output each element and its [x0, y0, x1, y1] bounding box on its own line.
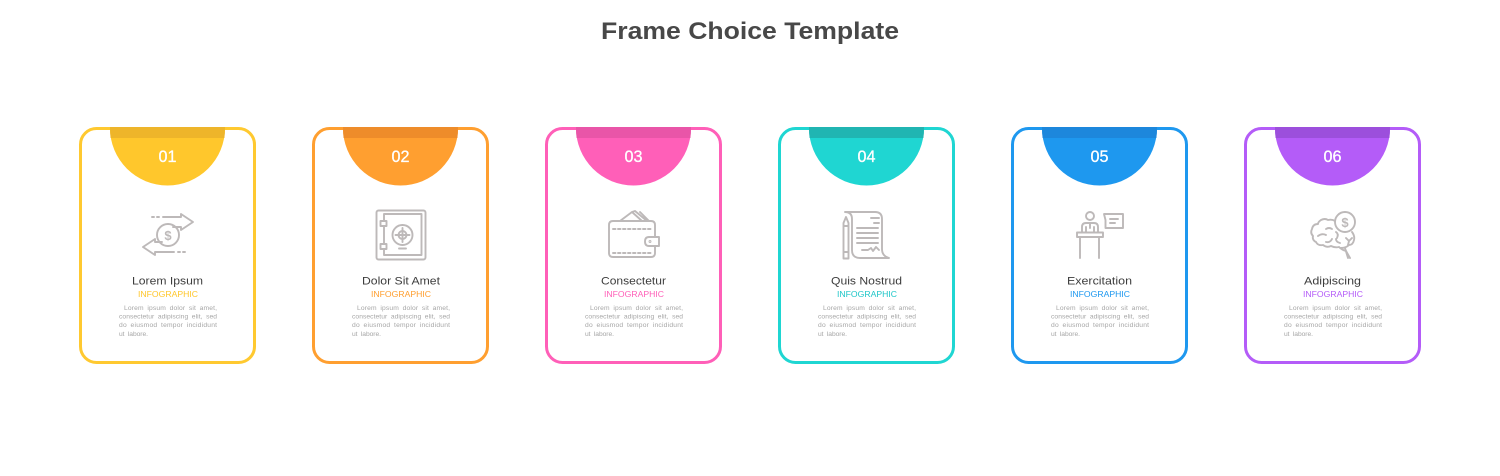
number tab 05 — [1042, 127, 1157, 185]
card frame 05 — [1012, 128, 1186, 362]
text block 03: do eiusmod tempor incididunt — [585, 322, 683, 329]
text block 01 — [119, 305, 217, 338]
panel: 06 Adipiscing — [1246, 127, 1420, 362]
card frame 01 — [80, 128, 254, 362]
text block 06: ut labore. — [1284, 331, 1313, 338]
icon: safe — [376, 210, 426, 260]
label 05: INFOGRAPHIC — [1070, 289, 1130, 299]
text block 05: consectetur adipiscing elit, sed — [1051, 314, 1149, 320]
text block 03: consectetur adipiscing elit, sed — [585, 314, 683, 320]
label 01: INFOGRAPHIC — [138, 289, 198, 299]
icon: brain with coin — [1311, 212, 1355, 258]
panel: 04 Quis Nostrud — [780, 127, 954, 362]
number tab 02 — [343, 127, 458, 185]
number tab 03: 03 — [624, 148, 642, 166]
text block 04: Lorem ipsum dolor sit amet, — [823, 305, 916, 312]
text block 03: Lorem ipsum dolor sit amet, — [590, 305, 683, 312]
title: Frame Choice Template — [601, 18, 899, 45]
text block 03: ut labore. — [585, 331, 614, 338]
heading 05: Exercitation — [1067, 276, 1132, 288]
text block 05 — [1051, 305, 1149, 338]
label 03: INFOGRAPHIC — [604, 289, 664, 299]
text block 01: ut labore. — [119, 331, 148, 338]
text block 01: Lorem ipsum dolor sit amet, — [124, 305, 217, 312]
heading 02: Dolor Sit Amet — [362, 276, 440, 288]
card frame 06 — [1246, 128, 1420, 362]
text block 03 — [585, 305, 683, 338]
label 02: INFOGRAPHIC — [371, 289, 431, 299]
text block 06: consectetur adipiscing elit, sed — [1284, 314, 1382, 320]
label 04: INFOGRAPHIC — [837, 289, 897, 299]
text block 02: Lorem ipsum dolor sit amet, — [357, 305, 450, 312]
text block 02: ut labore. — [352, 331, 381, 338]
icon: brain with coin: $ — [1341, 215, 1349, 230]
text block 05: ut labore. — [1051, 331, 1080, 338]
text block 06: Lorem ipsum dolor sit amet, — [1289, 305, 1382, 312]
number tab 01: 01 — [158, 148, 176, 166]
icon: scroll and pencil — [844, 212, 889, 258]
text block 04: ut labore. — [818, 331, 847, 338]
number tab 05: 05 — [1090, 148, 1108, 166]
icon: money exchange arrows: $ — [164, 228, 172, 243]
number tab 06 — [1275, 127, 1390, 185]
card frame 02 — [314, 128, 488, 362]
number tab 04: 04 — [858, 148, 876, 166]
number tab 01 — [110, 127, 225, 185]
text block 04: do eiusmod tempor incididunt — [818, 322, 916, 329]
text block 04 — [818, 305, 916, 338]
panel: 03 Consectetur — [546, 127, 720, 362]
heading 04: Quis Nostrud — [831, 276, 902, 288]
label 06: INFOGRAPHIC — [1303, 289, 1363, 299]
text block 04: consectetur adipiscing elit, sed — [818, 314, 916, 320]
text block 01: do eiusmod tempor incididunt — [119, 322, 217, 329]
icon: wallet — [609, 211, 659, 257]
number tab 02: 02 — [392, 148, 410, 166]
number tab 04 — [809, 127, 924, 185]
panel: 01 Lorem Ipsum — [80, 127, 254, 362]
text block 06 — [1284, 305, 1382, 338]
heading 06: Adipiscing — [1304, 276, 1361, 288]
heading 03: Consectetur — [601, 276, 666, 288]
panel: 02 Dolor Sit Amet — [314, 127, 488, 362]
text block 05: do eiusmod tempor incididunt — [1051, 322, 1149, 329]
card frame 04 — [780, 128, 954, 362]
panel: 05 Exercitation — [1012, 127, 1186, 362]
text block 06: do eiusmod tempor incididunt — [1284, 322, 1382, 329]
text block 02: do eiusmod tempor incididunt — [352, 322, 450, 329]
number tab 06: 06 — [1324, 148, 1342, 166]
number tab 03 — [576, 127, 691, 185]
text block 01: consectetur adipiscing elit, sed — [119, 314, 217, 320]
text block 02 — [352, 305, 450, 338]
icon: money exchange arrows — [143, 214, 193, 255]
card frame 03 — [546, 128, 720, 362]
icon: speaker at podium — [1077, 212, 1123, 258]
heading 01: Lorem Ipsum — [132, 276, 203, 288]
text block 02: consectetur adipiscing elit, sed — [352, 314, 450, 320]
text block 05: Lorem ipsum dolor sit amet, — [1056, 305, 1149, 312]
